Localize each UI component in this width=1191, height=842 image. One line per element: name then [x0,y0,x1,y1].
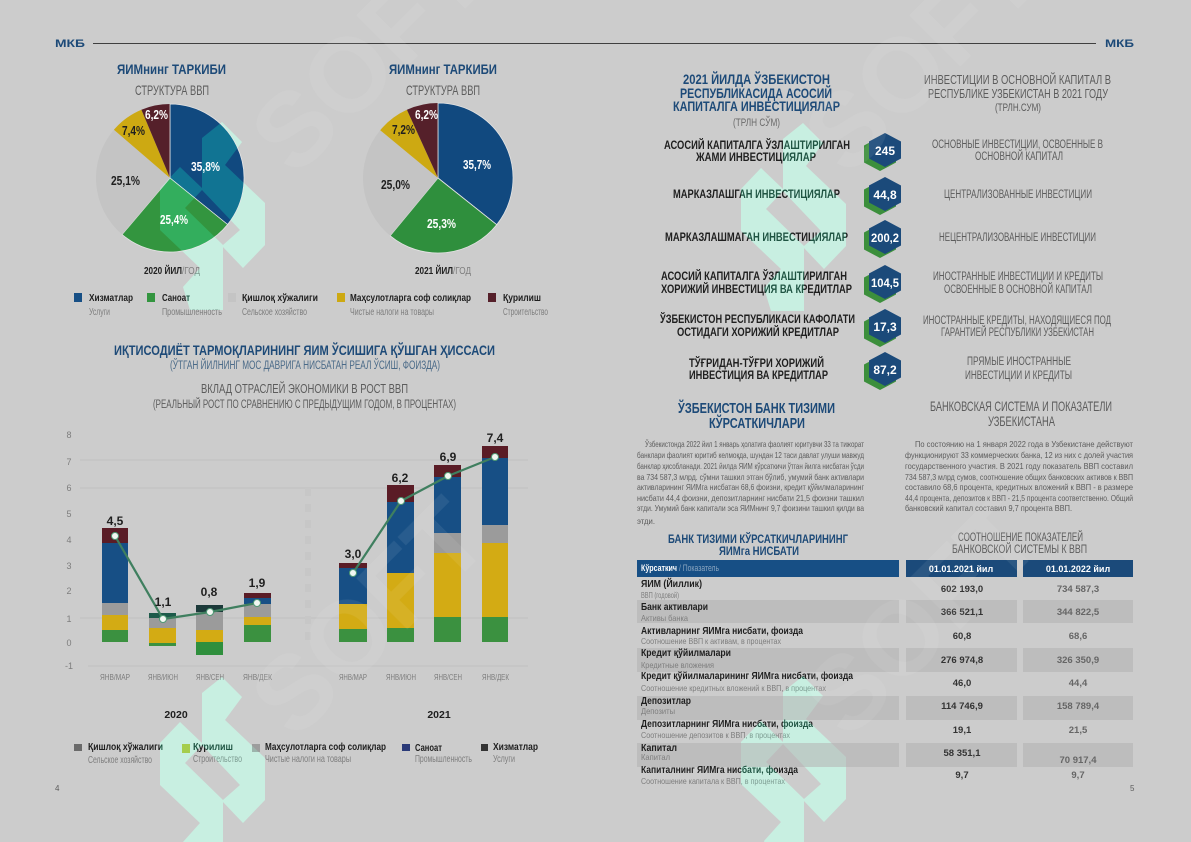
table row: deposits to GDP [641,718,1088,740]
heading: banking russian [930,398,1112,429]
heading: investments uzbek: (ТРЛН СЎМ) [733,116,780,129]
bar 2021 FY [482,446,508,642]
row: guaranteed credits: ОСТИДАГИ ХОРИЖИЙ КРЕДИТЛАР [677,324,839,339]
heading: table uzbek: БАНК ТИЗИМИ КЎРСАТКИЧЛАРИНИНГ [668,531,848,546]
bar 2020 9M [196,605,223,655]
table row: bank assets: 344 822,5 [1057,607,1100,618]
y axis labels: 0 [66,638,72,648]
text block: banking russian: составило 68,6 процента, кредитных вложений к ВВП - в размере [905,482,1133,492]
table row: credit: Кредит қўйилмалари [641,647,731,659]
watermark: SOFT lettering [229,0,1062,758]
legend: pie sectors: Сельское хозяйство [242,307,307,318]
legend: pie sectors [74,292,548,318]
table row: bank assets [641,602,1100,623]
legend: pie sectors: Строительство [503,307,548,318]
table header: 01.01.2022 йил [1046,564,1110,574]
heading: pie 2020 [117,61,226,98]
y axis labels: 5 [66,509,72,519]
pie chart: 2020: 7,4% [122,124,145,138]
heading: investments uzbek: КАПИТАЛГА ИНВЕСТИЦИЯЛАР [673,98,840,114]
heading: investments russian: (ТРЛН.СУМ) [995,102,1041,114]
year axis labels [164,709,451,721]
legend: bar chart: Қурилиш [193,742,233,753]
page number left: 4 [55,784,60,793]
row: direct foreign investments: ПРЯМЫЕ ИНОСТРАННЫЕ [967,356,1071,368]
row: decentralized: МАРКАЗЛАШМАГАН ИНВЕСТИЦИЯЛАР [665,230,848,244]
table row: capital: 58 351,1 [944,748,981,759]
legend: pie sectors: Услуги [89,307,110,318]
text block: banking russian: государственного участия. В 2021 году показатель ВВП составил [905,461,1133,471]
bar value labels: 4,5 [107,514,124,528]
table row: credit to GDP: 44,4 [1069,678,1088,689]
row: centralized: МАРКАЗЛАШГАН ИНВЕСТИЦИЯЛАР [673,187,840,201]
page header: right brand: МКБ [1105,38,1134,50]
row: direct foreign investments: 87,2 [873,363,897,377]
year label 2021: 2021 ЙИЛ/ГОД [415,264,471,277]
text block: banking uzbek: этди. [637,516,655,526]
year label 2020: 2020 ЙИЛ/ГОД [144,264,200,277]
panel: GDP structure pies [74,61,548,318]
heading: banking uzbek: КЎРСАТКИЧЛАРИ [709,414,805,432]
table row: deposits: 114 746,9 [941,701,983,712]
table row: assets to GDP: 68,6 [1069,631,1087,642]
legend: bar chart: Услуги [493,754,515,765]
heading: investments russian [924,72,1111,114]
legend: pie sectors: Хизматлар [89,293,133,304]
bar value labels: 7,4 [487,431,504,445]
y axis labels: 8 [66,430,72,440]
legend: bar chart: Маҳсулотларга соф солиқлар [265,741,386,753]
legend: pie sectors: Чистые налоги на товары [350,307,434,318]
row: guaranteed credits: ИНОСТРАННЫЕ КРЕДИТЫ, НАХОДЯЩИЕСЯ ПОД [923,315,1111,327]
legend: bar chart: Саноат [415,743,442,754]
table row: GDP [641,577,1099,600]
legend: bar chart: Сельское хозяйство [88,755,152,766]
year axis labels: 2021 [427,709,451,721]
heading: pie 2021: СТРУКТУРА ВВП [406,82,480,98]
text block: banking russian: банковский капитал составил 9,7 процента ВВП. [905,503,1072,513]
heading: table uzbek [668,531,848,558]
heading: contribution: ВКЛАД ОТРАСЛЕЙ ЭКОНОМИКИ В РОСТ ВВП [201,381,408,396]
table row: capital to GDP: 9,7 [1071,770,1085,781]
table row: deposits [641,696,1100,716]
row: total investments [664,133,1103,171]
bar value labels: 6,2 [392,471,409,485]
table header: 01.01.2021 йил [929,564,993,574]
watermark: SOFT lettering: SOFT [782,477,1062,758]
pie chart: 2021: 7,2% [392,123,415,137]
heading: banking russian: УЗБЕКИСТАНА [988,413,1055,429]
table row: deposits to GDP: Соотношение депозитов к ВВП, в процентах [641,730,791,740]
table row: deposits to GDP: Депозитларнинг ЯИМга нисбати, фоизда [641,718,813,730]
heading: table uzbek: ЯИМга НИСБАТИ [719,544,799,558]
table row: credit to GDP [641,670,1088,693]
table row: GDP: ВВП (годовой) [641,590,679,600]
table row: deposits: Депозиты [641,706,675,716]
category labels: ЯНВ/СЕН [196,672,224,682]
page number right: 5 [1130,784,1135,793]
row: total investments: АСОСИЙ КАПИТАЛГА ЎЗЛАШТИРИЛГАН [664,137,850,152]
row: centralized: ЦЕНТРАЛИЗОВАННЫЕ ИНВЕСТИЦИИ [944,189,1092,201]
pie chart: 2020 [96,104,244,252]
row: guaranteed credits: ГАРАНТИЕЙ РЕСПУБЛИКИ УЗБЕКИСТАН [941,326,1094,339]
row: decentralized: НЕЦЕНТРАЛИЗОВАННЫЕ ИНВЕСТИЦИИ [939,232,1096,244]
bar 2020 H1 [149,613,176,646]
table row: credit: 276 974,8 [941,655,983,666]
text block: banking uzbek: нисбати 44,4 фоизни, депозитларнинг нисбати 21,5 фоизни ташкил [637,493,864,503]
heading: banking uzbek [677,399,835,432]
table row: credit to GDP: Соотношение кредитных вложений к ВВП, в процентах [641,683,827,693]
heading: contribution: ИҚТИСОДИЁТ ТАРМОҚЛАРИНИНГ ЯИМ ЎСИШИГА ҚЎШГАН ҲИССАСИ [114,343,495,358]
table header [637,560,1133,577]
text block: banking uzbek: активларининг ЯИМга нисбатан 68,6 фоизни, кредит қўйилмаларининг [637,482,864,492]
legend: pie sectors: Қурилиш [503,293,541,304]
row: decentralized [665,220,1096,258]
table row: capital to GDP [641,764,1085,786]
row: decentralized: 200,2 [871,231,899,245]
heading: pie 2020: ЯИМнинг ТАРКИБИ [117,61,226,77]
row: centralized: 44,8 [873,188,897,202]
heading: pie 2020: СТРУКТУРА ВВП [135,82,209,98]
pie chart: 2021: 6,2% [415,108,438,122]
panel: banking indicators table [637,531,1133,786]
heading: investments uzbek: РЕСПУБЛИКАСИДА АСОСИЙ [680,84,832,101]
category labels: ЯНВ/СЕН [434,672,462,682]
legend: pie sectors: Промышленность [162,307,222,318]
table row: capital to GDP: 9,7 [955,770,969,781]
row: direct foreign investments [689,352,1072,390]
table row: credit [641,647,1099,670]
table row: assets to GDP [641,625,1087,646]
legend: pie sectors: Саноат [162,293,190,304]
bar value labels: 3,0 [345,547,362,561]
stacked bar chart [102,446,508,655]
heading: banking uzbek: ЎЗБЕКИСТОН БАНК ТИЗИМИ [677,399,835,417]
pie chart: 2020: 25,4% [160,213,188,227]
pie chart: 2021: 25,0% [381,178,410,192]
y axis labels: 1 [66,614,72,624]
legend: pie sectors: Қишлоқ хўжалиги [242,292,318,304]
text block: banking russian: 734 587,3 млрд сумов, соотношение общих банковских активов к ВВП [905,472,1133,482]
legend: bar chart: Қишлоқ хўжалиги [88,741,163,753]
row: direct foreign investments: ТЎҒРИДАН-ТЎҒРИ ХОРИЖИЙ [689,355,824,370]
y axis labels: 2 [66,586,72,596]
text block: banking russian: По состоянию на 1 января 2022 года в Узбекистане действуют [915,439,1133,449]
table row: credit to GDP: 46,0 [953,678,971,689]
bar 2021 Q1 [339,563,367,642]
panel: banking system text [637,398,1133,526]
bar 2020 Q1 [102,528,128,642]
line: total growth 2021 [350,454,498,576]
row: total investments: ЖАМИ ИНВЕСТИЦИЯЛАР [695,150,816,164]
bar 2021 H1 [387,485,414,642]
table row: capital to GDP: Капиталнинг ЯИМга нисбати, фоизда [641,764,798,776]
y axis labels [65,430,73,671]
bar value labels: 1,1 [155,595,172,609]
table header: Кўрсаткич [641,563,677,573]
table row: GDP: ЯИМ (Йиллик) [641,577,702,590]
table row: capital: Капитал [641,743,677,754]
legend: bar chart [74,741,538,766]
category labels [100,672,509,682]
category labels: ЯНВ/ДЕК [243,672,272,682]
text block: banking uzbek: банклар ҳисобланади. 2021 йилда ЯИМ кўрсаткичи ўтган йилга нисбатан ўсди [637,461,864,471]
text block: banking uzbek: этди. Умумий банк капитали эса ЯИМнинг 9,7 фоизини ташкил қилди ва [637,503,864,513]
panel: sector contribution to GDP growth [65,343,538,766]
heading: contribution [114,343,495,411]
table row: capital: Капитал [641,752,670,762]
table row: deposits to GDP: 21,5 [1069,725,1088,736]
pie chart: 2021: 35,7% [463,158,491,172]
table row: capital [641,743,1097,766]
heading: pie 2021: ЯИМнинг ТАРКИБИ [389,61,497,77]
legend: bar chart: Строительство [193,754,242,765]
bar 2021 9M [434,465,461,642]
table row: GDP: 602 193,0 [941,584,983,595]
row: direct foreign investments: ИНВЕСТИЦИИ И КРЕДИТЫ [965,370,1072,382]
row: total investments: ОСНОВНЫЕ ИНВЕСТИЦИИ, ОСВОЕННЫЕ В [932,139,1103,151]
pie chart: 2021: 25,3% [427,217,456,231]
watermark: mint logos [160,122,846,842]
heading: table russian: БАНКОВСКОЙ СИСТЕМЫ К ВВП [952,543,1087,556]
heading: investments russian: РЕСПУБЛИКЕ УЗБЕКИСТАН В 2021 ГОДУ [928,86,1109,101]
y axis labels: -1 [65,661,73,671]
row: foreign investments and credits: ОСВОЕННЫЕ В ОСНОВНОЙ КАПИТАЛ [944,283,1092,296]
text block: banking russian [905,439,1133,513]
row: guaranteed credits: 17,3 [873,320,897,334]
pie chart: 2020: 6,2% [145,108,168,122]
category labels: ЯНВ/МАР [100,672,130,682]
text block: banking uzbek: ва 734 587,3 млрд. сўмни ташкил этган бўлиб, умумий банк активлари [637,472,864,482]
row: guaranteed credits: ЎЗБЕКИСТОН РЕСПУБЛИКАСИ КАФОЛАТИ [659,311,855,326]
heading: pie 2021 [389,61,497,98]
row: total investments: 245 [875,144,895,158]
legend: bar chart: Хизматлар [493,742,538,753]
table row: bank assets: Активы банка [641,613,688,623]
bar value labels [107,431,504,609]
table row: bank assets: 366 521,1 [941,607,984,618]
table row: assets to GDP: Активларнинг ЯИМга нисбати, фоизда [641,625,803,637]
y axis labels: 4 [66,535,72,545]
watermark: logo colour tint over content [160,122,846,842]
table row: capital to GDP: Соотношение капитала к ВВП, в процентах [641,776,786,786]
table row: bank assets: Банк активлари [641,602,708,613]
bar 2020 FY [244,593,271,642]
category labels: ЯНВ/ДЕК [482,672,509,682]
table row: credit to GDP: Кредит қўйилмаларининг ЯИМга нисбати, фоизда [641,670,853,682]
pie chart: 2020: 25,1% [111,174,140,188]
table row: credit: Кредитные вложения [641,660,714,670]
y axis labels: 6 [66,483,72,493]
panel: investments 2021 [659,70,1111,390]
heading: table russian [952,531,1087,556]
heading: table russian: СООТНОШЕНИЕ ПОКАЗАТЕЛЕЙ [958,531,1083,544]
heading: investments uzbek [673,70,840,129]
legend: pie sectors: Маҳсулотларга соф солиқлар [350,292,471,304]
row: foreign investments and credits: ХОРИЖИЙ ИНВЕСТИЦИЯ ВА КРЕДИТЛАР [661,281,852,296]
watermark: SOFT lettering: SOFT [229,477,509,758]
year axis labels: 2020 [164,709,188,721]
heading: investments russian: ИНВЕСТИЦИИ В ОСНОВНОЙ КАПИТАЛ В [924,72,1111,87]
bar value labels: 0,8 [201,585,218,599]
table row: deposits to GDP: 19,1 [953,725,972,736]
table header: / Показатель [679,563,719,573]
page header: left brand: МКБ [55,38,85,50]
heading: contribution: (ЎТГАН ЙИЛНИНГ МОС ДАВРИГА НИСБАТАН РЕАЛ ЎСИШ, ФОИЗДА) [170,359,440,372]
y axis labels: 7 [66,457,72,467]
text block: banking uzbek: банклари фаолият юритиб келмоқда, шундан 12 таси давлат улуши мавжуд [637,450,864,460]
row: foreign investments and credits: ИНОСТРАННЫЕ ИНВЕСТИЦИИ И КРЕДИТЫ [933,271,1103,283]
table row: assets to GDP: Соотношение ВВП к активам, в процентах [641,636,782,646]
table row: deposits: 158 789,4 [1057,701,1100,712]
row: guaranteed credits [659,309,1111,347]
text block: banking russian: 44,4 процента, депозитов к ВВП - 21,5 процента соответственно. Общий [905,493,1133,503]
row: direct foreign investments: ИНВЕСТИЦИЯ ВА КРЕДИТЛАР [689,368,828,382]
row: foreign investments and credits: АСОСИЙ КАПИТАЛГА ЎЗЛАШТИРИЛГАН [661,268,847,283]
table row: GDP: 734 587,3 [1057,584,1099,595]
y axis labels: 3 [66,561,72,571]
heading: investments uzbek: 2021 ЙИЛДА ЎЗБЕКИСТОН [683,70,830,87]
legend: bar chart: Промышленность [415,754,472,765]
text block: banking uzbek [637,438,864,526]
bar value labels: 6,9 [440,450,457,464]
row: centralized [673,177,1092,215]
category labels: ЯНВ/МАР [339,672,367,682]
row: foreign investments and credits [661,265,1103,303]
text block: banking uzbek: Ўзбекистонда 2022 йил 1 январь ҳолатига фаолият юритувчи 33 та тижорат [645,438,864,449]
legend: bar chart: Чистые налоги на товары [265,754,351,765]
table row: assets to GDP: 60,8 [953,631,971,642]
row: foreign investments and credits: 104,5 [871,276,899,290]
line: total growth 2020 [112,532,260,622]
category labels: ЯНВ/ИЮН [386,672,416,682]
text block: banking russian: функционируют 33 коммерческих банка, 12 из них с долей участия [905,450,1133,460]
row: total investments: ОСНОВНОЙ КАПИТАЛ [975,150,1063,163]
category labels: ЯНВ/ИЮН [148,672,178,682]
table row: capital: 70 917,4 [1060,755,1097,766]
table row: credit: 326 350,9 [1057,655,1099,666]
bar value labels: 1,9 [249,576,266,590]
pie chart: 2021 [363,103,513,253]
pie chart: 2020: 35,8% [191,160,220,174]
heading: contribution: (РЕАЛЬНЫЙ РОСТ ПО СРАВНЕНИЮ С ПРЕДЫДУЩИМ ГОДОМ, В ПРОЦЕНТАХ) [153,398,456,411]
table row: deposits: Депозитлар [641,696,691,707]
